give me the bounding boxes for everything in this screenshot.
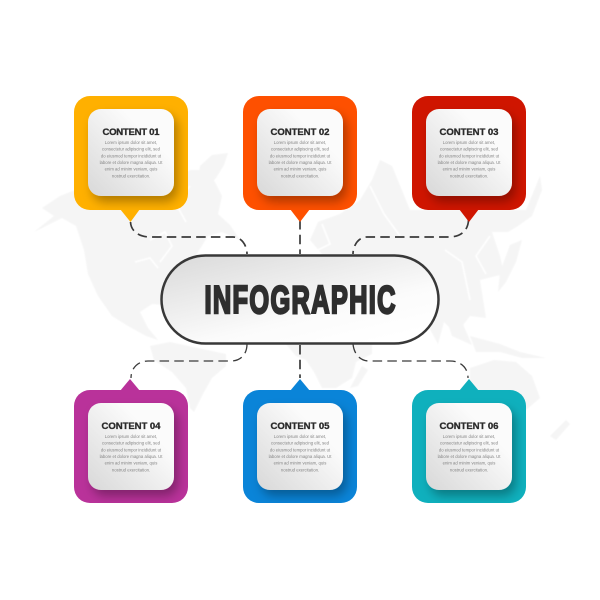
card: content 05: labore et dolore magna aliqua. Ut	[269, 454, 332, 459]
card: content 04: labore et dolore magna aliqua. Ut	[100, 454, 163, 459]
card: content 02: Lorem ipsum dolor sit amet,	[274, 140, 326, 145]
world map background	[34, 153, 570, 440]
card: content 04: Lorem ipsum dolor sit amet,	[105, 434, 157, 439]
card: content 01	[74, 96, 188, 222]
card: content 04: consectetur adipiscing elit, sed	[102, 441, 161, 446]
card: content 01: nostrud exercitation.	[112, 173, 150, 178]
card: content 03: nostrud exercitation.	[450, 173, 488, 178]
card: content 04: nostrud exercitation.	[112, 467, 150, 472]
central pill: Infographic	[162, 256, 438, 344]
card: content 03: enim ad minim veniam, quis	[443, 167, 495, 172]
card: content 02: nostrud exercitation.	[281, 173, 319, 178]
card: content 06: Lorem ipsum dolor sit amet,	[443, 434, 495, 439]
card: content 01: labore et dolore magna aliqua. Ut	[100, 160, 163, 165]
card: content 06: consectetur adipiscing elit, sed	[440, 441, 499, 446]
card: content 02: enim ad minim veniam, quis	[274, 167, 326, 172]
card: content 01: enim ad minim veniam, quis	[105, 167, 157, 172]
connector lines	[130, 220, 468, 378]
card: content 05: consectetur adipiscing elit, sed	[271, 441, 330, 446]
card: content 01: Lorem ipsum dolor sit amet,	[105, 140, 157, 145]
card: content 06: CONTENT 06	[440, 421, 498, 432]
card: content 05: nostrud exercitation.	[281, 467, 319, 472]
card: content 02: CONTENT 02	[270, 127, 330, 138]
card: content 06: do eiusmod tempor incididunt ut	[439, 447, 500, 452]
card: content 02	[243, 96, 357, 222]
card: content 01: consectetur adipiscing elit, sed	[102, 147, 161, 152]
card: content 03: consectetur adipiscing elit, sed	[440, 147, 499, 152]
card: content 02: consectetur adipiscing elit, sed	[271, 147, 330, 152]
card: content 02: labore et dolore magna aliqua. Ut	[269, 160, 332, 165]
card: content 05: CONTENT 05	[270, 421, 330, 432]
card: content 06: labore et dolore magna aliqua. Ut	[438, 454, 501, 459]
card: content 04: do eiusmod tempor incididunt ut	[101, 447, 162, 452]
card: content 06: enim ad minim veniam, quis	[443, 461, 495, 466]
card: content 03: labore et dolore magna aliqua. Ut	[438, 160, 501, 165]
card: content 04	[74, 379, 188, 503]
card: content 04: CONTENT 04	[102, 421, 161, 432]
central title: INFOGRAPHIC	[204, 278, 397, 321]
card: content 03: Lorem ipsum dolor sit amet,	[443, 140, 495, 145]
card: content 05: Lorem ipsum dolor sit amet,	[274, 434, 326, 439]
card: content 01: CONTENT 01	[102, 127, 160, 138]
card: content 03: do eiusmod tempor incididunt ut	[439, 153, 500, 158]
card: content 01: do eiusmod tempor incididunt ut	[101, 153, 162, 158]
card: content 05: do eiusmod tempor incididunt ut	[270, 447, 331, 452]
card: content 06	[412, 379, 526, 503]
card: content 05: enim ad minim veniam, quis	[274, 461, 326, 466]
card: content 03: CONTENT 03	[440, 127, 498, 138]
card: content 02: do eiusmod tempor incididunt ut	[270, 153, 331, 158]
card: content 05	[243, 379, 357, 503]
card: content 03	[412, 96, 526, 222]
card: content 04: enim ad minim veniam, quis	[105, 461, 157, 466]
card: content 06: nostrud exercitation.	[450, 467, 488, 472]
